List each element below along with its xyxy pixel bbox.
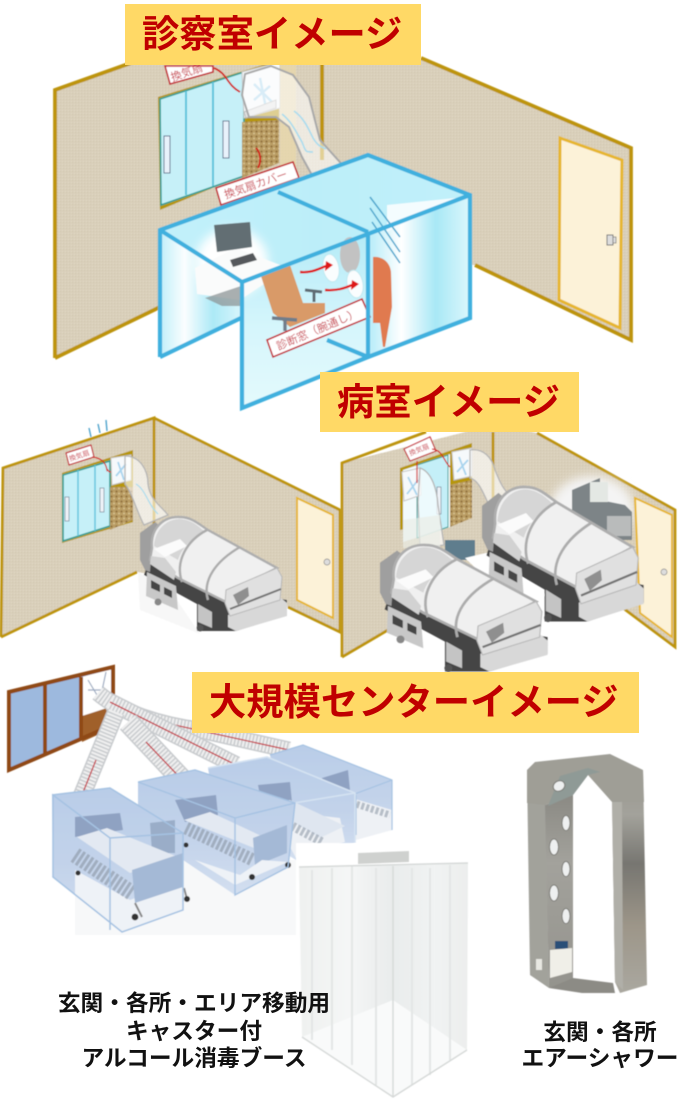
threshold: [549, 978, 615, 993]
air shower gate: [527, 754, 647, 993]
window: [158, 60, 279, 210]
back-wall equipment: [445, 476, 634, 560]
air nozzles: [550, 779, 570, 924]
isolation bed: [140, 517, 287, 632]
right panel: [612, 770, 647, 993]
left glass panel: [160, 232, 242, 357]
flexible ducts: [80, 693, 289, 800]
booth frame: [160, 155, 470, 408]
red airflow arrows: [300, 261, 359, 290]
panel: single-bed ward scene: [1, 418, 340, 637]
flexible ducts: [403, 450, 512, 548]
white plate: [550, 948, 572, 978]
upper right white pane: [387, 197, 465, 232]
frame: [299, 863, 468, 1097]
ventilation fan cover: [110, 487, 133, 530]
top margin mask: [0, 0, 693, 4]
door: [559, 138, 622, 328]
front-left panel: [545, 795, 573, 988]
heading: consultation room: 診察室イメージ: [142, 13, 402, 55]
patient seat and silhouette: [340, 237, 392, 347]
alcohol disinfection booth: [296, 843, 472, 1097]
label: fan: [165, 60, 213, 84]
clear consultation booth: [160, 155, 470, 408]
caption: air shower: [522, 1019, 678, 1071]
left wall: [55, 0, 322, 358]
white floor patch behind bed: [138, 572, 200, 634]
switches: [536, 959, 542, 970]
ventilation fans: [402, 448, 472, 501]
red connector: [92, 457, 111, 472]
caption: alcohol disinfection booth: アルコール消毒ブース: [81, 1045, 307, 1071]
wall frame: [342, 432, 675, 657]
door: [297, 498, 333, 618]
booth background: [296, 843, 472, 1058]
booth 1: [52, 788, 190, 932]
heading: large-scale centre: [192, 672, 639, 733]
curtain folds: [312, 865, 450, 1085]
monitor and desk: [195, 222, 288, 306]
red connector lines: [214, 68, 260, 168]
booth 3: [208, 757, 355, 860]
heading: ward: 病室イメージ: [337, 381, 560, 423]
left wall: [342, 425, 493, 657]
front glass panel: [242, 232, 368, 408]
control panel: [555, 941, 568, 949]
caption: alcohol disinfection booth: [58, 990, 330, 1071]
curtain body: [299, 863, 468, 1097]
blue exhaust arrows: [370, 197, 400, 263]
caption: alcohol disinfection booth: キャスター付: [126, 1018, 262, 1044]
label: fan cover: [216, 162, 299, 205]
window: [62, 450, 133, 543]
isolation bed: back: [482, 487, 644, 622]
booth 4: [270, 745, 392, 843]
booth 2: [138, 770, 295, 895]
ventilation fan: [111, 455, 131, 485]
doctor's chair: [260, 265, 325, 331]
left wall: [1, 418, 154, 637]
label: fan: 換気扇: [169, 60, 205, 84]
wall frame: [1, 418, 340, 637]
red connectors: [417, 449, 450, 483]
label: fan: 換気扇: [68, 448, 91, 463]
right wall: [493, 425, 675, 647]
flexible duct: [242, 66, 347, 192]
corner post highlight: [280, 65, 296, 171]
label: examination window: 診断窓（腕通し）: [274, 306, 361, 353]
arm openings: [321, 253, 365, 299]
caption: alcohol disinfection booth: 玄関・各所・エリア移動用: [58, 990, 330, 1016]
label: fan: [66, 445, 94, 465]
window: [9, 667, 113, 770]
booth back glass: [160, 155, 470, 408]
floor triangle: [302, 1000, 467, 1097]
heading: ward: [320, 372, 579, 432]
caption: air shower: 玄関・各所: [543, 1019, 657, 1045]
label: fan cover: 換気扇カバー: [222, 167, 289, 202]
right wall: [154, 418, 340, 632]
right wall: [322, 0, 631, 340]
floor haze: [75, 860, 300, 935]
caption: air shower: エアーシャワー: [522, 1045, 678, 1071]
opening head: [548, 768, 600, 806]
exhaust arrows: [89, 420, 107, 437]
ventilation fan cover: [450, 480, 472, 527]
top band: [527, 754, 644, 805]
flexible duct: [125, 456, 168, 525]
ventilation fan: [242, 62, 280, 118]
heading: consultation room: [125, 4, 421, 65]
label: examination window: [267, 299, 370, 357]
isolation bed: front: [380, 545, 548, 672]
window: [400, 443, 472, 542]
panel: consultation room scene: [55, 0, 631, 408]
label: fan: [404, 437, 436, 461]
panel: large-scale centre scene: [9, 667, 392, 935]
gap between beds: [465, 552, 545, 610]
right inner strip: [612, 798, 623, 990]
ventilation fan cover: [242, 120, 279, 178]
heading: large-scale centre: 大規模センターイメージ: [209, 681, 619, 723]
panel: double-bed ward scene: [342, 425, 675, 672]
ceiling unit: [358, 851, 409, 864]
right glass panel: [372, 195, 470, 355]
label: fan: 換気扇: [408, 442, 430, 458]
door: [635, 498, 672, 637]
wall frame: [55, 0, 631, 358]
bed booth row: [52, 745, 392, 935]
left outer panel: [527, 770, 549, 988]
booth top face: [160, 155, 470, 282]
